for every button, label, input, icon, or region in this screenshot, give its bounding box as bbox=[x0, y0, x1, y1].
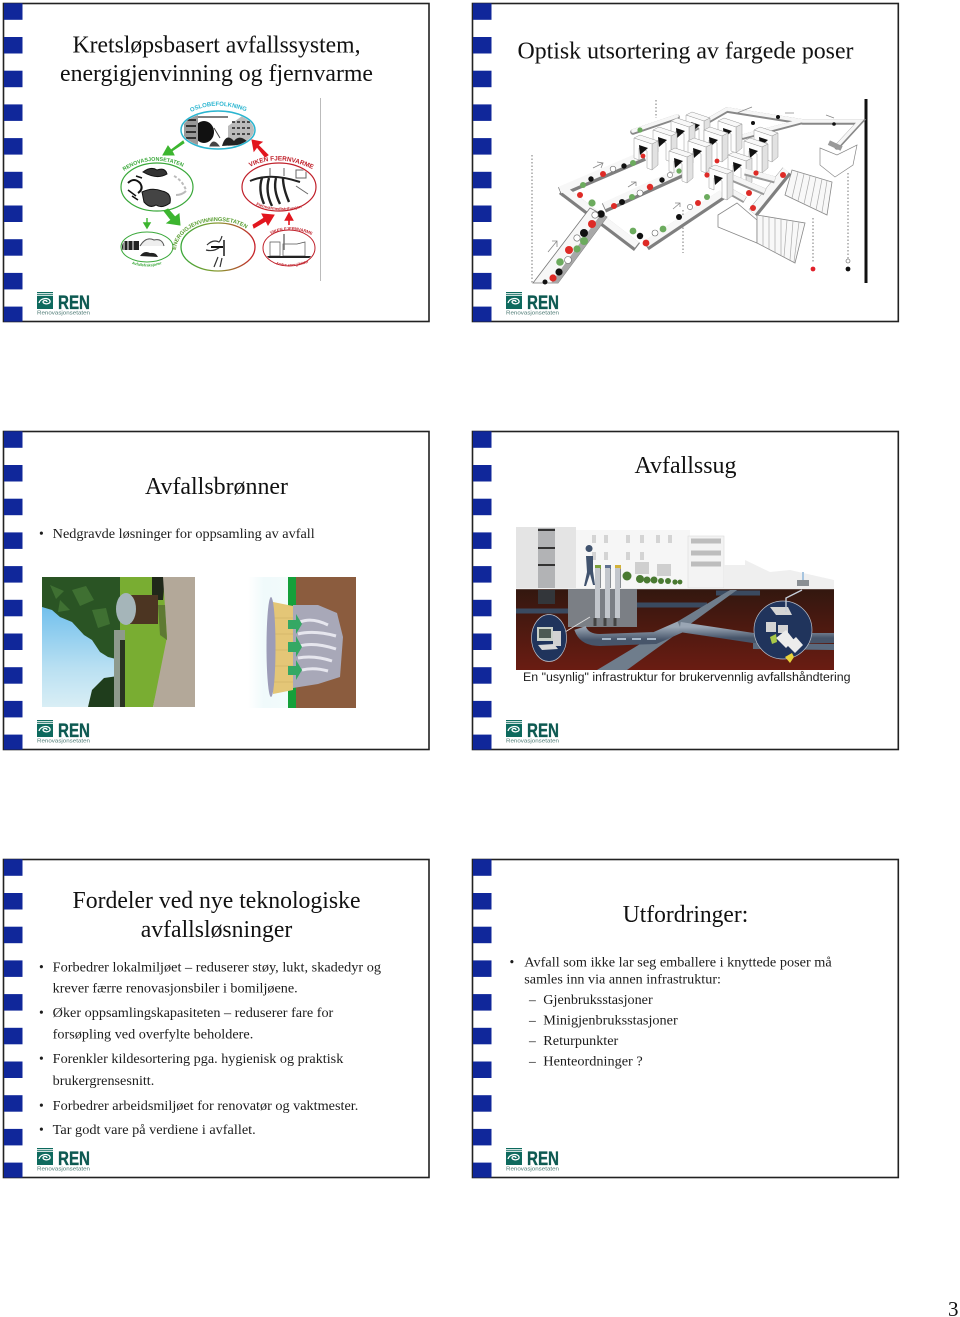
soil bbox=[516, 588, 834, 670]
bags bbox=[542, 115, 836, 284]
bullet list: Minigjenbruksstasjoner bbox=[543, 1012, 678, 1027]
logo: REN: REN bbox=[58, 293, 90, 314]
bullet list: • bbox=[510, 954, 514, 970]
illustration: underground container cross-section bbox=[248, 577, 356, 708]
green arrows bbox=[288, 614, 302, 680]
bullet list: – bbox=[528, 1054, 536, 1068]
storage box bbox=[820, 145, 857, 177]
arrow: red to viken bbox=[253, 214, 274, 228]
heading: utfordringer: Utfordringer: bbox=[623, 902, 748, 928]
node: oslobefolkning: OSLOBEFOLKNING bbox=[190, 102, 247, 112]
small direction arrows bbox=[548, 107, 834, 252]
logo: REN: Renovasjonsetaten bbox=[506, 1166, 559, 1172]
pipes bbox=[597, 590, 737, 670]
logo: REN bbox=[506, 720, 559, 744]
node: energigjenvinningsetaten bbox=[172, 217, 256, 272]
panel: fordeler bbox=[4, 859, 429, 1178]
arrow: green to renovasjon bbox=[163, 141, 184, 155]
node: energigjenvinningsetaten: ENERGIGJENVINNINGSETATEN bbox=[172, 217, 248, 250]
node: viken fjernvarme bbox=[241, 156, 317, 212]
logo: REN: REN bbox=[527, 1149, 559, 1170]
bullet list: – bbox=[528, 1012, 536, 1027]
logo: REN bbox=[37, 292, 90, 316]
bullet list: Avfall som ikke lar seg emballere i knyttede poser må bbox=[524, 954, 832, 970]
panel: avfallssug bbox=[472, 431, 898, 750]
arrow: red up small bbox=[286, 214, 292, 225]
heading line: avfallsløsninger: avfallsløsninger bbox=[141, 917, 292, 943]
heading: optisk utsortering: Optisk utsortering av fargede poser bbox=[518, 38, 854, 64]
bullet list: Henteordninger ? bbox=[543, 1054, 643, 1068]
heading: avfallsbrønner: Avfallsbrønner bbox=[145, 474, 288, 500]
platform and lower container bbox=[718, 203, 805, 263]
caption: En "usynlig" infrastruktur for brukervennlig avfallshåndtering bbox=[523, 670, 851, 684]
node: annen energikilde: VIKEN FJERNVARME bbox=[270, 227, 313, 235]
bullet list: • bbox=[39, 1005, 44, 1020]
bullet list: samles inn via annen infrastruktur: bbox=[524, 972, 721, 986]
bullet list: Forenkler kildesortering pga. hygienisk og praktisk bbox=[53, 1051, 344, 1066]
trees bbox=[622, 572, 682, 585]
black scale bar bbox=[864, 99, 868, 283]
bullet list: Tar godt vare på verdiene i avfallet. bbox=[53, 1122, 256, 1137]
bullet list: – bbox=[528, 1033, 536, 1048]
node: viken fjernvarme: Fjernvarmedistribusjon bbox=[256, 202, 302, 210]
logo: REN: REN bbox=[527, 293, 559, 314]
collection station callout bbox=[754, 590, 812, 663]
logo: REN bbox=[506, 292, 559, 316]
top belts bbox=[633, 109, 860, 147]
node: oslobefolkning bbox=[180, 102, 256, 150]
logo: REN bbox=[506, 1148, 559, 1172]
logo: REN: Renovasjonsetaten bbox=[37, 738, 90, 744]
bullet list: • bbox=[39, 960, 44, 974]
node: avfallsfraksjoner: Avfallsfraksjoner bbox=[132, 262, 162, 267]
logo: REN: Renovasjonsetaten bbox=[506, 738, 559, 744]
control room callout bbox=[532, 614, 566, 662]
panel: optisk utsortering bbox=[472, 3, 898, 322]
bullet list: Forbedrer arbeidsmiljøet for renovatør og vaktmester. bbox=[53, 1098, 358, 1113]
bullet list: – bbox=[528, 992, 536, 1007]
main belt bbox=[533, 208, 607, 283]
upper container bbox=[785, 170, 832, 215]
arrow: green to energigjenvinning bbox=[164, 209, 180, 225]
logo: REN: Renovasjonsetaten bbox=[37, 1166, 90, 1172]
logo: REN: Renovasjonsetaten bbox=[506, 310, 559, 316]
arrow: green down small bbox=[144, 218, 150, 228]
logo: REN: Renovasjonsetaten bbox=[37, 310, 90, 316]
bullet list: Gjenbruksstasjoner bbox=[543, 992, 653, 1007]
panel: avfallsbrønner bbox=[4, 431, 429, 750]
conveyor belts bbox=[560, 154, 787, 247]
bullet list bbox=[39, 960, 381, 1137]
bullet list: brukergrensesnitt. bbox=[53, 1073, 154, 1088]
logo: REN bbox=[37, 1148, 90, 1172]
bullet list: • bbox=[39, 1098, 44, 1113]
bullet list: Returpunkter bbox=[543, 1033, 619, 1048]
heading: avfallssug: Avfallssug bbox=[634, 453, 736, 479]
bullet text: • bbox=[39, 526, 44, 541]
node: annen energikilde: Andre energikilder bbox=[276, 260, 308, 266]
heading: fordeler: Fordeler ved nye teknologiske bbox=[72, 888, 360, 914]
bins bbox=[600, 569, 621, 588]
node: avfallsfraksjoner bbox=[120, 232, 174, 267]
bullet list: krever færre renovasjonsbiler i bomiljøene. bbox=[53, 981, 298, 996]
photo: underground waste unit in park bbox=[42, 577, 195, 707]
gates back rows bbox=[686, 112, 710, 147]
logo: REN: REN bbox=[58, 721, 90, 742]
node: viken fjernvarme: VIKEN FJERNVARME bbox=[248, 156, 314, 169]
arrow: red to oslo bbox=[252, 140, 268, 157]
person bbox=[584, 545, 595, 586]
heading line: energigjenvinning: energigjenvinning og fjernvarme bbox=[60, 61, 373, 87]
heading: kretsløpsbasert: Kretsløpsbasert avfallssystem, bbox=[72, 32, 360, 58]
logo: REN bbox=[37, 720, 90, 744]
gates front row bbox=[634, 135, 658, 170]
bullet list: Øker oppsamlingskapasiteten – reduserer fare for bbox=[53, 1005, 334, 1020]
logo: REN: REN bbox=[58, 1149, 90, 1170]
chart: circular system diagram bbox=[120, 98, 321, 281]
illustration: sorting conveyor system bbox=[532, 99, 868, 284]
bullet list: Forbedrer lokalmiljøet – reduserer støy, lukt, skadedyr og bbox=[53, 960, 381, 974]
node: annen energikilde bbox=[262, 227, 316, 266]
illustration: vacuum waste infrastructure bbox=[516, 527, 834, 670]
bullet list: • bbox=[39, 1051, 44, 1066]
bullet list: • bbox=[39, 1122, 44, 1137]
bullet list bbox=[510, 954, 832, 1068]
node: renovasjonsetaten: RENOVASJONSETATEN bbox=[122, 157, 184, 171]
logo: REN: REN bbox=[527, 721, 559, 742]
panel: kretsløpsbasert avfallssystem bbox=[2, 2, 430, 322]
bullet list: forsøpling ved overfylte beholdere. bbox=[53, 1026, 253, 1042]
panel: utfordringer bbox=[472, 859, 898, 1178]
bullet text: Nedgravde løsninger for oppsamling av avfall bbox=[53, 526, 315, 541]
node: renovasjonsetaten bbox=[120, 157, 194, 212]
